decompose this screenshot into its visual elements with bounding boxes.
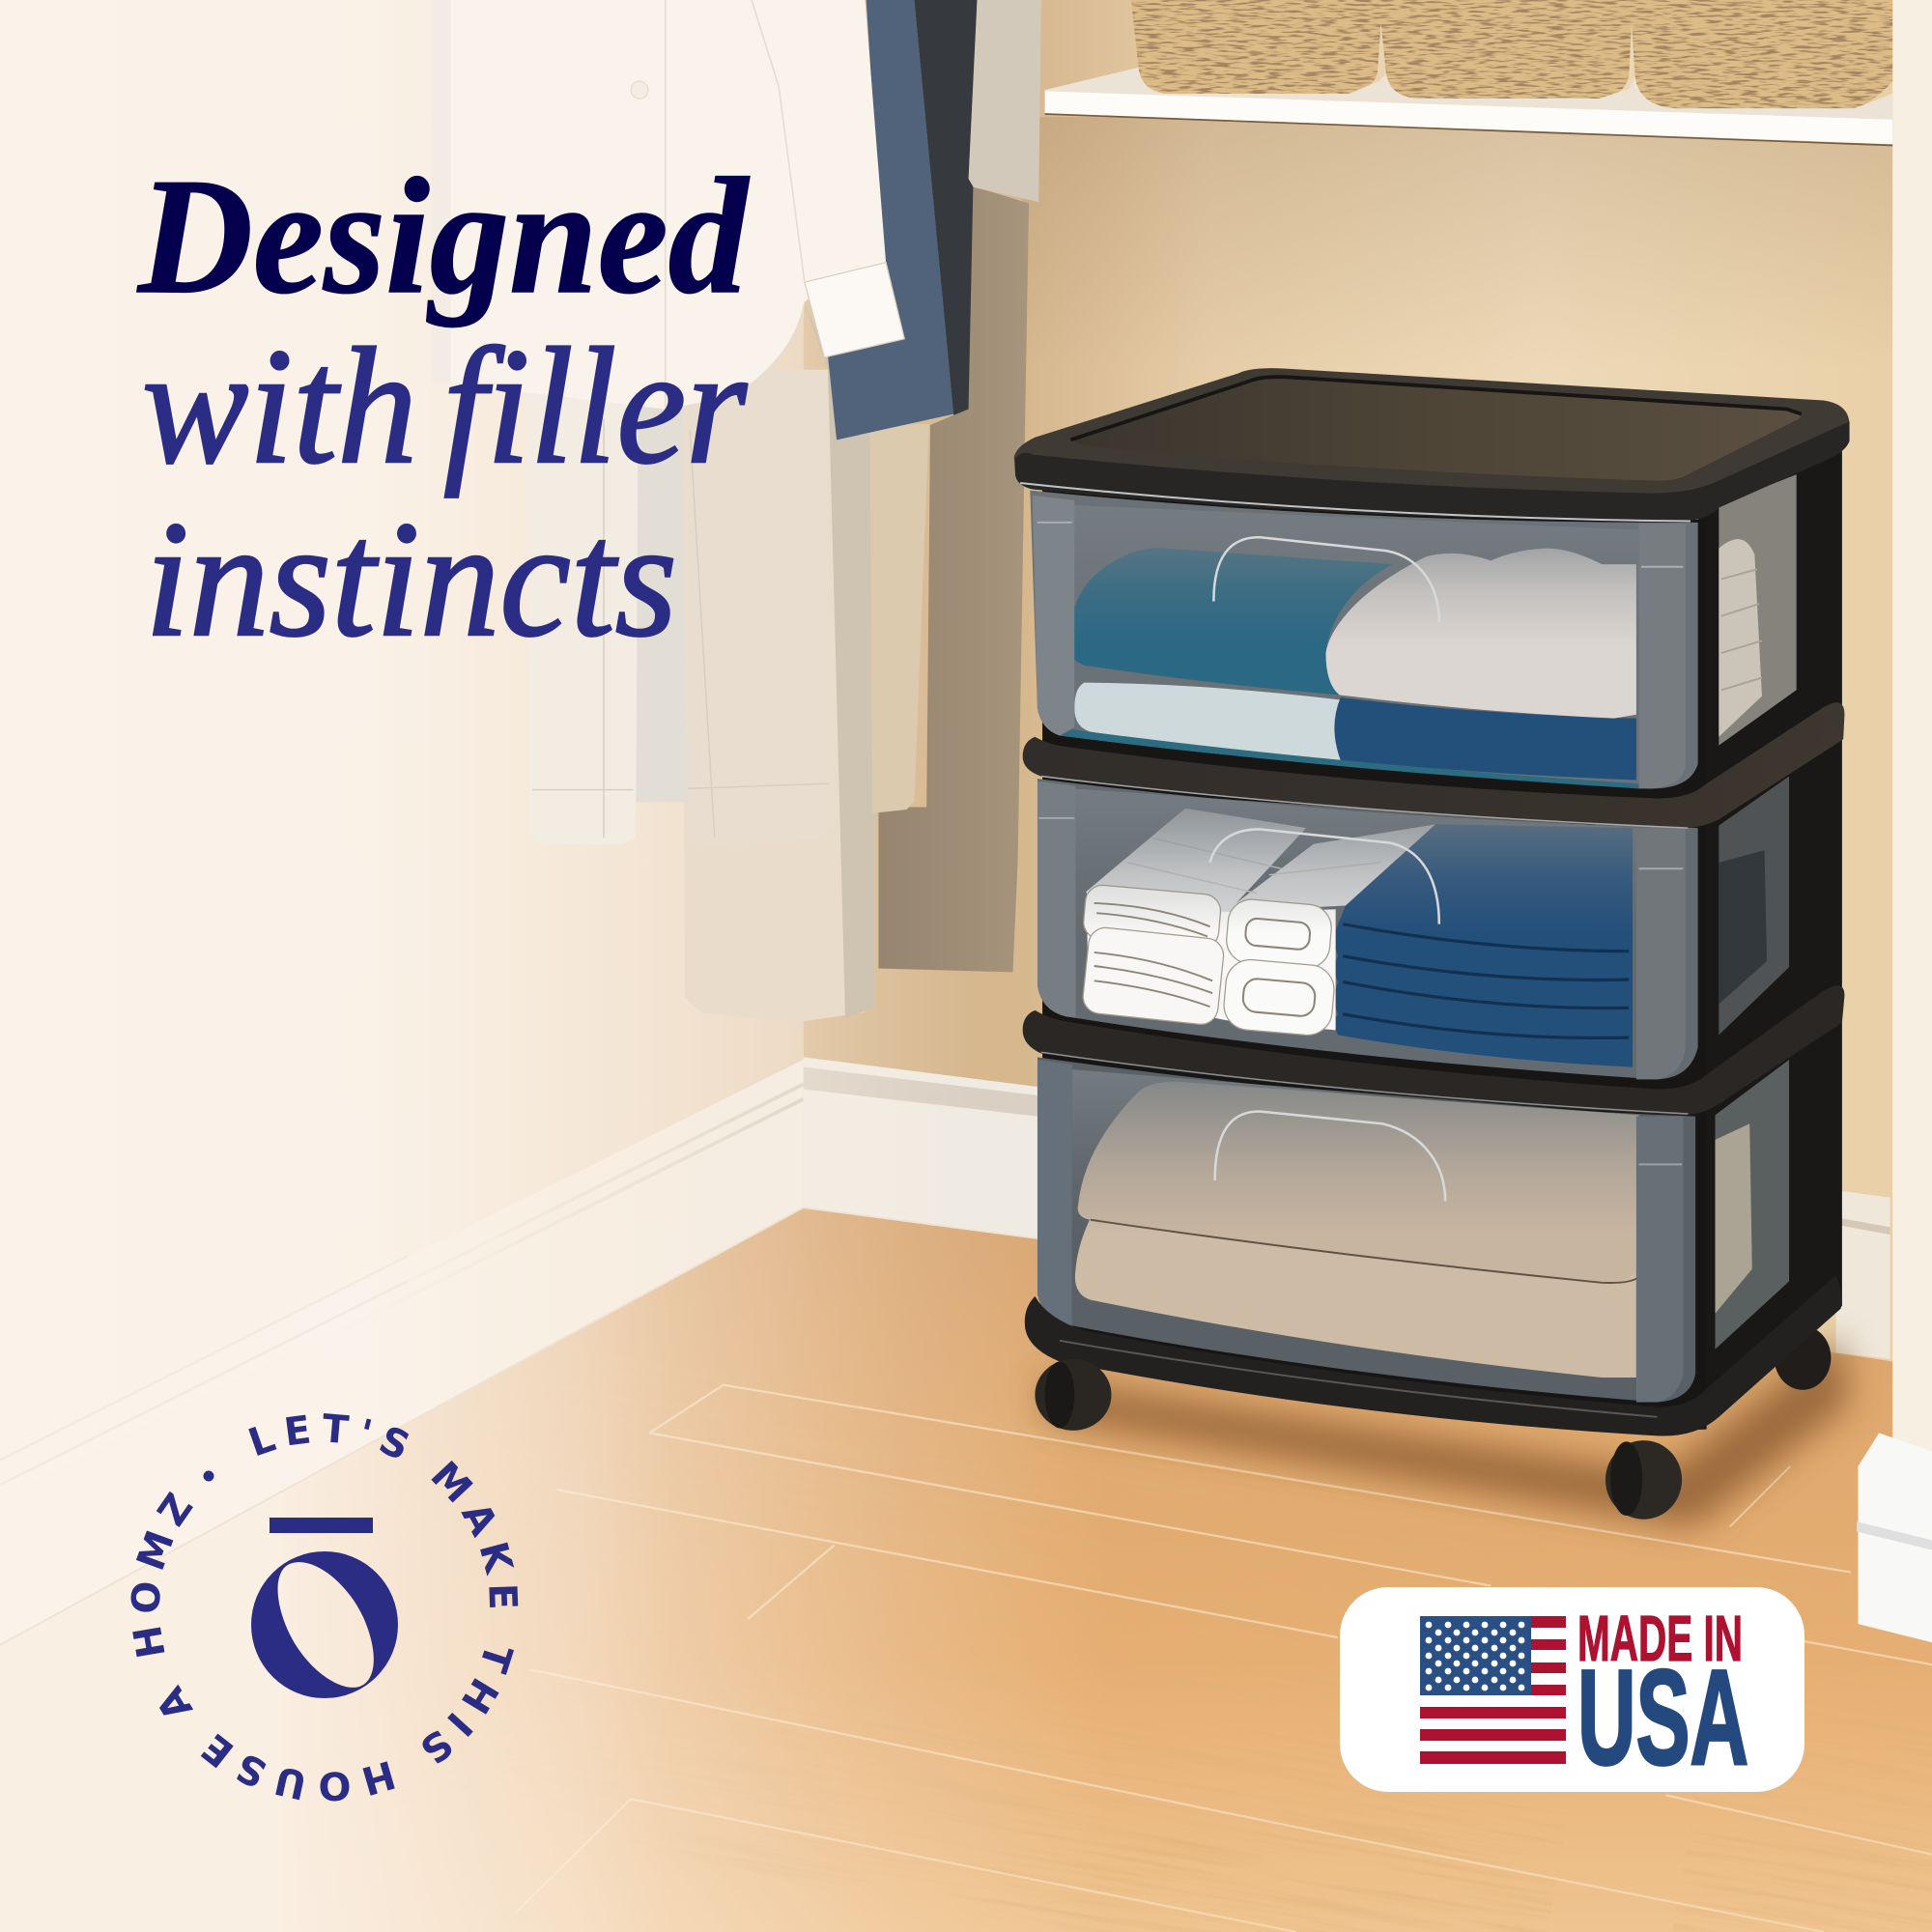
shirt cuff (805, 263, 904, 357)
navy folded blanket (1334, 697, 1636, 780)
lid recess (1070, 377, 1801, 481)
cart front dark frame (1042, 487, 1707, 1432)
top lid (1014, 368, 1850, 522)
wooden floor (283, 1208, 1932, 1932)
brown trousers (878, 185, 1029, 972)
faint left baseboard lines (0, 1257, 407, 1485)
ring path definition (159, 1442, 490, 1773)
badge background (1340, 1587, 1804, 1792)
left wall baseboard (0, 1060, 804, 1645)
headline (136, 145, 751, 671)
hanging towel (969, 0, 1041, 202)
left post (1037, 1060, 1072, 1325)
Made in USA badge (1340, 1587, 1804, 1793)
left side wall (0, 0, 804, 1645)
headline line 2 word 1: with (142, 315, 417, 498)
back wall baseboard (804, 1057, 1890, 1359)
cart middle rim 2 (1023, 985, 1844, 1115)
white folded sweater (1325, 549, 1636, 719)
right baseboard (1857, 1433, 1932, 1642)
shadow under shelf (1023, 117, 1897, 370)
towel roll left top (1082, 884, 1222, 950)
cart rear frame (1698, 443, 1842, 1417)
drawer 1 (1030, 491, 1698, 788)
headline line 3: instincts (145, 488, 677, 671)
lid front face (1015, 421, 1850, 522)
shirt button (631, 81, 648, 99)
wood grain (1009, 1879, 1925, 1932)
separator dot (203, 1470, 214, 1482)
drawer floor tint (1060, 729, 1638, 788)
floor-fade left block (0, 1195, 283, 1932)
right post (1636, 1117, 1683, 1403)
white shirt (451, 0, 886, 409)
trouser seams and hems (532, 419, 828, 838)
brand badge (131, 1413, 518, 1801)
drawer handle (1210, 829, 1439, 924)
wall-floor edge (0, 1208, 1037, 1645)
closet wall (804, 0, 1932, 1479)
cart middle rim 1 (1023, 702, 1844, 828)
towel roll right bottom (1222, 957, 1336, 1037)
drawer 3 (1037, 1057, 1695, 1403)
hanging clothes (431, 0, 1041, 1023)
glass tint (1072, 505, 1638, 788)
right post (1636, 828, 1686, 1079)
drawer 2 (1037, 779, 1698, 1079)
left post (1037, 781, 1076, 1018)
three-drawer storage cart (1014, 368, 1850, 1520)
side window drawer 1 (1719, 474, 1797, 746)
light blue towel (1074, 683, 1341, 760)
teal blanket (1069, 548, 1392, 695)
side window drawer 2 (1719, 777, 1789, 1035)
front right caster (1605, 1440, 1682, 1520)
MADE IN label: MADE IN (1577, 1603, 1743, 1675)
robe (681, 394, 875, 1023)
cabinet floor shadow (1041, 1337, 1848, 1528)
circular slogan: LET'S MAKE THIS HOUSE A HOMZ (131, 1413, 518, 1801)
headline line 2 word 2: filler (443, 315, 748, 498)
towel backing (1087, 892, 1336, 1030)
navy jacket (828, 0, 953, 440)
left post (1033, 496, 1074, 735)
lower beige blanket (1075, 1202, 1636, 1378)
cart base (1025, 1275, 1841, 1436)
back caster (1775, 1325, 1831, 1390)
front left caster (1035, 1359, 1112, 1431)
right wall column (1892, 0, 1932, 1452)
drawer handle (1215, 1112, 1445, 1202)
white shelf (1045, 68, 1892, 146)
floor fade (283, 1208, 1030, 1932)
glass tint (1072, 1069, 1638, 1403)
USA label: USA (1577, 1641, 1748, 1793)
beige trousers (680, 370, 828, 845)
wicker baskets (1131, 0, 1892, 108)
white trousers (525, 394, 639, 844)
US flag (1420, 1616, 1566, 1764)
towel top panel right (1225, 824, 1435, 912)
shirt placket and seam (666, 0, 805, 409)
glass tint (1072, 788, 1638, 1079)
rail strip (431, 0, 451, 384)
headline line 1: Designed (136, 145, 751, 328)
drawer handle (1213, 537, 1439, 622)
upper beige blanket (1078, 1082, 1638, 1283)
white rolled towels (1081, 809, 1435, 1037)
right post (1638, 524, 1686, 788)
tan trousers (870, 424, 929, 813)
towel roll left bottom (1081, 926, 1225, 1026)
logo letter o (251, 1551, 398, 1698)
navy blanket stack (1334, 824, 1633, 1067)
side window drawer 3 (1716, 1060, 1789, 1350)
logo macron bar (270, 1518, 373, 1533)
floorboard seams (515, 1385, 1932, 1932)
towel roll right top (1225, 897, 1333, 971)
grey gap (636, 394, 693, 802)
soft white fade overlay (0, 0, 985, 1932)
towel top panel left (1086, 809, 1306, 918)
